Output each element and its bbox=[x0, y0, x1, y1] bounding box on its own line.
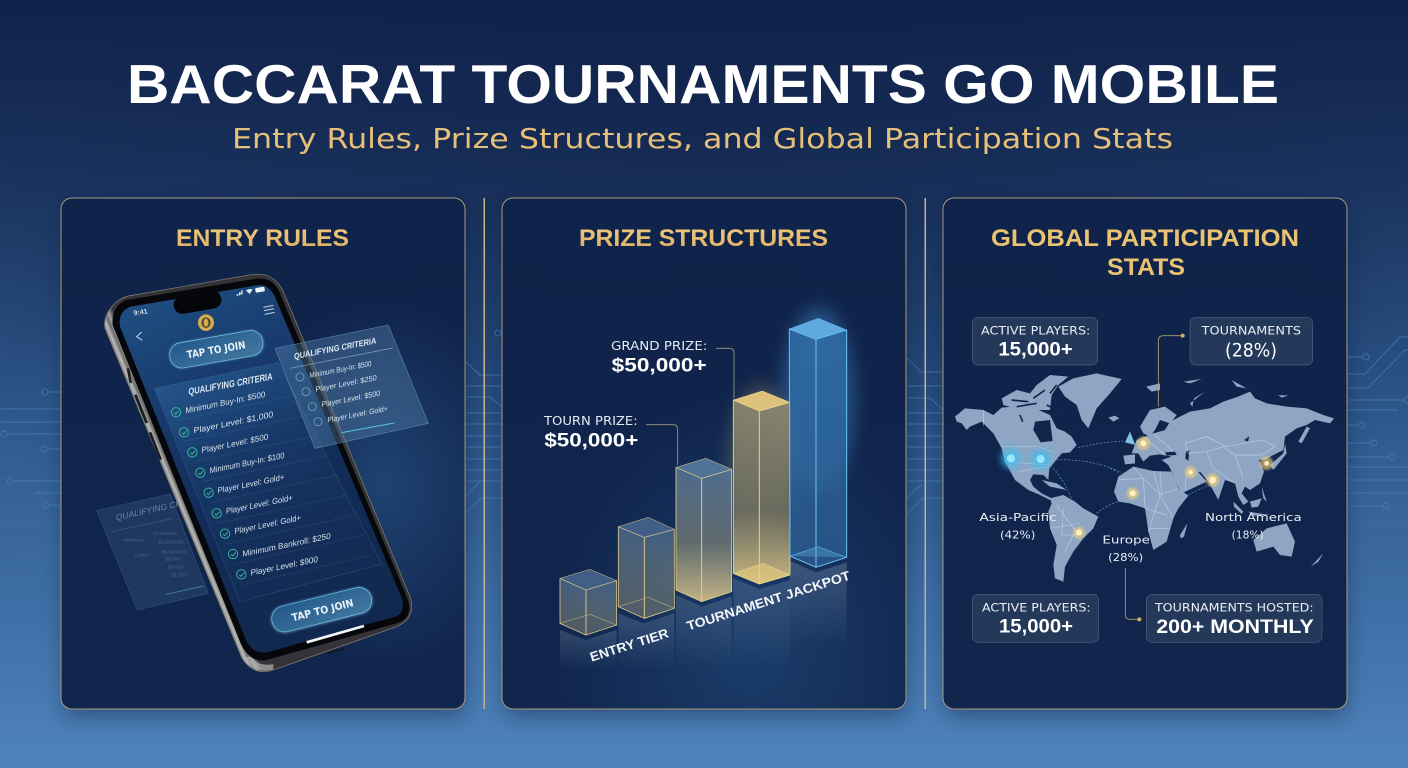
callout: grand prize: GRAND PRIZE: bbox=[611, 339, 707, 353]
floating criteria card: Player Level: Gold+ bbox=[327, 404, 388, 425]
eastern landmass bbox=[1114, 379, 1334, 567]
callout: tourn prize: $50,000+ bbox=[544, 430, 638, 451]
back card: $1,000 bbox=[172, 573, 187, 579]
notch bbox=[172, 289, 223, 315]
top join button: TAP TO JOIN bbox=[186, 339, 246, 361]
americas borders bbox=[983, 410, 1080, 552]
inland seas bbox=[1165, 436, 1267, 465]
stat box: tournaments: (28%) bbox=[1225, 341, 1277, 362]
stat box: tournaments hosted bbox=[1146, 594, 1322, 642]
reflections bbox=[560, 561, 847, 670]
bottom join button: TAP TO JOIN bbox=[291, 597, 355, 624]
stat box: tournaments: TOURNAMENTS bbox=[1201, 323, 1301, 337]
leader dots bbox=[1137, 334, 1185, 621]
criteria rows: Player Level: Gold+ bbox=[218, 472, 284, 495]
eastern connection arcs bbox=[1110, 468, 1210, 497]
callout: tourn prize bbox=[543, 414, 678, 465]
bar 5 bbox=[789, 318, 847, 567]
panel: prize structures bbox=[502, 198, 906, 709]
panel: entry rules bbox=[61, 198, 465, 709]
region labels: Europe bbox=[1102, 533, 1150, 546]
back card: Minimum bbox=[123, 538, 144, 544]
americas connection arcs bbox=[1053, 441, 1123, 513]
back card: $3,000 bbox=[165, 557, 180, 563]
region labels: (42%) bbox=[1000, 528, 1035, 541]
world map: eurasia africa oceania bbox=[1110, 379, 1334, 567]
circuit pattern bbox=[0, 330, 1408, 560]
coin logo bbox=[198, 314, 214, 331]
stat box: active players top: 15,000+ bbox=[998, 339, 1073, 360]
back card: $3,000 bbox=[168, 564, 184, 570]
region labels: (18%) bbox=[1232, 528, 1264, 541]
stat box: tournaments bbox=[1190, 317, 1313, 365]
bar chart bbox=[543, 307, 855, 670]
stat box: active players top bbox=[972, 317, 1098, 365]
list heading: QUALIFYING CRITERIA bbox=[188, 371, 273, 398]
criteria rows: Player Level: $1,000 bbox=[194, 409, 274, 435]
screen bbox=[120, 285, 403, 653]
heading: global participation stats: STATS bbox=[1107, 254, 1185, 281]
back card: $5,000,000 bbox=[162, 549, 187, 555]
axis label: tournament jackpot: TOURNAMENT JACKPOT bbox=[685, 568, 852, 634]
heading: global participation stats bbox=[991, 225, 1299, 281]
floating criteria card: Player Level: $500 bbox=[321, 389, 380, 409]
callout: grand prize bbox=[611, 339, 734, 398]
region labels: (28%) bbox=[1108, 551, 1143, 564]
hudson bay and arctic channels bbox=[1012, 385, 1063, 442]
floating criteria card: Minimum Buy-In: $500 bbox=[309, 359, 371, 380]
back card: $1,000,000 bbox=[158, 539, 184, 545]
leader lines bbox=[1125, 336, 1182, 619]
floating criteria card bbox=[275, 325, 428, 448]
divider bbox=[484, 198, 485, 709]
list card bbox=[154, 363, 382, 602]
stat box: tournaments hosted: 200+ MONTHLY bbox=[1156, 617, 1314, 638]
criteria rows: Player Level: $500 bbox=[202, 431, 269, 455]
criteria rows: Minimum Buy-In: $100 bbox=[210, 450, 285, 475]
bar 1 bbox=[560, 569, 617, 635]
back card: Level bbox=[135, 553, 147, 559]
floating criteria card: Player Level: $250 bbox=[315, 373, 377, 394]
criteria rows: Player Level: Gold+ bbox=[226, 492, 293, 516]
status bar bbox=[133, 287, 275, 340]
home bar bbox=[307, 626, 364, 642]
title: BACCARAT TOURNAMENTS GO MOBILE bbox=[127, 53, 1279, 115]
phone body bbox=[105, 274, 412, 672]
axis label: entry tier: ENTRY TIER bbox=[588, 625, 671, 665]
region labels: Asia-Pacific bbox=[979, 511, 1057, 524]
americas landmass bbox=[955, 373, 1122, 582]
back card: Conditions bbox=[153, 531, 177, 537]
bar 4 bbox=[733, 391, 790, 584]
divider bbox=[924, 198, 926, 709]
criteria rows bbox=[171, 389, 372, 585]
top join button bbox=[167, 328, 266, 371]
status bar: 9:41 bbox=[133, 308, 148, 317]
back card: QUALIFYING CR bbox=[116, 498, 182, 523]
criteria rows: Minimum Buy-In: $500 bbox=[185, 389, 266, 415]
stat box: active players bottom: 15,000+ bbox=[999, 616, 1073, 637]
back card bbox=[97, 494, 208, 610]
criteria rows: Player Level: $900 bbox=[251, 554, 318, 578]
stat box: active players top: ACTIVE PLAYERS: bbox=[981, 323, 1090, 337]
bottom join button bbox=[268, 584, 376, 636]
eastern borders bbox=[1118, 433, 1275, 532]
heading: entry rules: ENTRY RULES bbox=[176, 225, 349, 252]
bar 2 bbox=[618, 517, 674, 618]
callout: grand prize: $50,000+ bbox=[612, 355, 707, 376]
stat box: tournaments hosted: TOURNAMENTS HOSTED: bbox=[1154, 601, 1314, 615]
heading: global participation stats: GLOBAL PARTICIPATION bbox=[991, 225, 1299, 252]
stat box: active players bottom bbox=[972, 594, 1099, 642]
bezel bbox=[112, 278, 409, 660]
americas glow points bbox=[1001, 448, 1085, 539]
eastern glow points bbox=[1127, 437, 1273, 499]
criteria rows: Minimum Bankroll: $250 bbox=[242, 530, 331, 559]
region labels bbox=[979, 511, 1302, 564]
subtitle: Entry Rules, Prize Structures, and Global Participation Stats bbox=[232, 122, 1173, 155]
map labels and stat boxes bbox=[972, 317, 1322, 642]
heading: prize structures: PRIZE STRUCTURES bbox=[579, 225, 828, 252]
floating criteria card: QUALIFYING CRITERIA bbox=[294, 335, 377, 361]
stat box: active players bottom: ACTIVE PLAYERS: bbox=[982, 601, 1091, 615]
callout: tourn prize: TOURN PRIZE: bbox=[543, 414, 638, 428]
panel: global participation bbox=[943, 198, 1347, 709]
bar 3 bbox=[676, 458, 732, 602]
world map: americas bbox=[955, 373, 1123, 582]
criteria rows: Player Level: Gold+ bbox=[234, 512, 301, 536]
region labels: North America bbox=[1205, 511, 1302, 524]
shadows under panels bbox=[64, 206, 1346, 716]
phone illustration bbox=[97, 274, 428, 672]
